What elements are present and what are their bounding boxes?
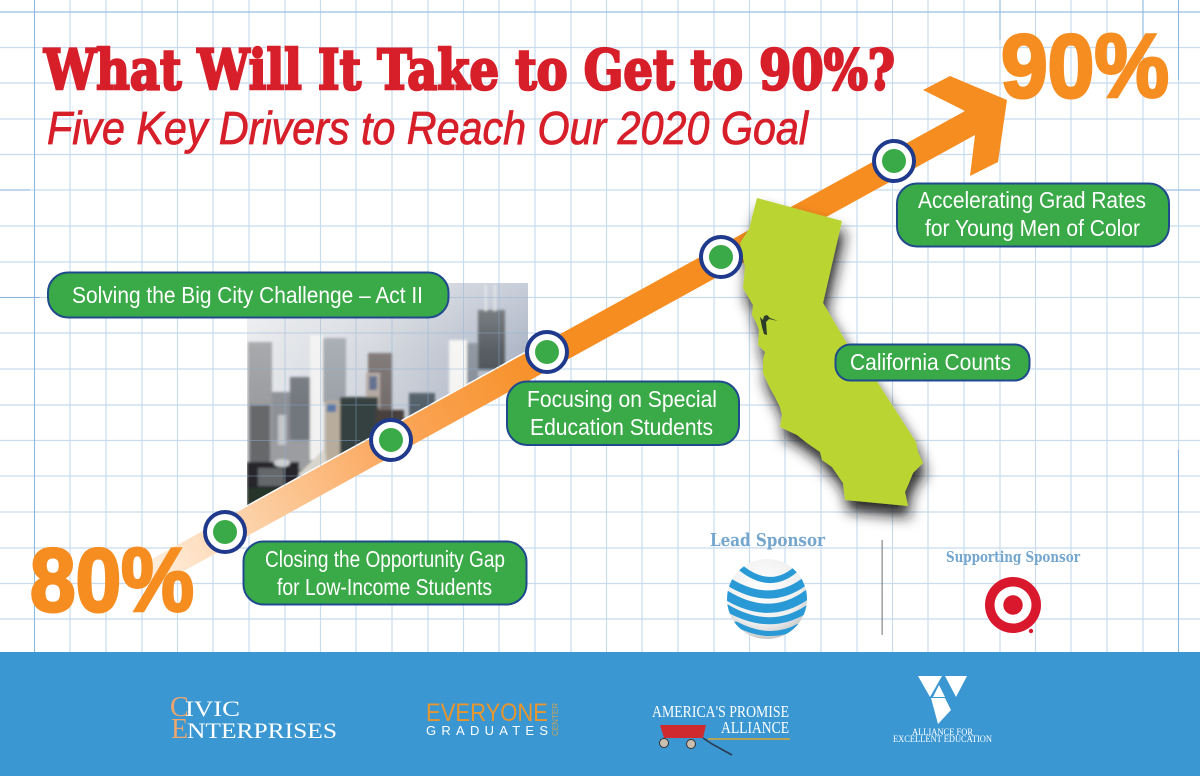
logo: Alliance for Excellent Education [893, 676, 992, 744]
logo: America's Promise Alliance [652, 702, 790, 755]
callout: Solving the Big City Challenge [48, 272, 448, 318]
marker 3 [527, 332, 567, 372]
logo: Alliance for Excellent Education: ALLIANCE FOR [912, 727, 973, 737]
callout: Solving the Big City Challenge: Solving the Big City Challenge – Act II [72, 282, 423, 308]
callout: Accelerating Grad Rates [897, 184, 1169, 246]
logo: Civic Enterprises: C [170, 692, 189, 723]
footer band [0, 652, 1200, 776]
logo: AT&T globe [726, 559, 808, 639]
logo: Target [985, 577, 1041, 633]
logo: America's Promise Alliance: AMERICA'S PROMISE [652, 702, 789, 721]
label: Supporting Sponsor: Supporting Sponsor [946, 548, 1081, 566]
callout: Focusing on Special Education Students: Education Students [530, 414, 713, 440]
callout: California Counts: California Counts [850, 349, 1011, 375]
callout: Accelerating Grad Rates: Accelerating Grad Rates [918, 187, 1146, 213]
callout: Focusing on Special Education Students: Focusing on Special [527, 386, 717, 412]
map: California [740, 198, 923, 506]
callout: Closing the Opportunity Gap: for Low-Income Students [277, 574, 492, 600]
logo: Civic Enterprises: NTERPRISES [187, 718, 337, 743]
callout: Closing the Opportunity Gap: Closing the Opportunity Gap [265, 546, 505, 572]
logo: Everyone Graduates Center: CENTER [551, 703, 560, 736]
marker 5 [874, 141, 914, 181]
callout: California Counts [836, 344, 1030, 380]
photo: city skyline [247, 283, 528, 510]
arrow: 80% to 90% [141, 76, 1007, 588]
logo: Everyone Graduates Center: GRADUATES [426, 723, 548, 738]
big number: 80%: 80% [30, 531, 194, 631]
logo: America's Promise Alliance: ALLIANCE [721, 718, 789, 737]
marker 2 [371, 420, 411, 460]
marker 1 [205, 512, 245, 552]
label: Lead Sponsor: Lead Sponsor [710, 530, 825, 551]
callout: Focusing on Special Education Students [507, 382, 739, 445]
callout: Accelerating Grad Rates: for Young Men of Color [925, 215, 1140, 241]
logo: Alliance for Excellent Education: EXCELLENT EDUCATION [893, 734, 992, 744]
logo: Civic Enterprises [170, 692, 337, 745]
logo: Everyone Graduates Center: EVERYONE [426, 699, 548, 727]
title: What Will It Take to Get to 90%? [43, 37, 895, 102]
logo: Civic Enterprises: IVIC [185, 696, 240, 721]
divider [882, 540, 883, 635]
marker 4 [701, 237, 741, 277]
big number: 90%: 90% [1001, 17, 1169, 117]
subtitle: Five Key Drivers to Reach Our 2020 Goal [47, 102, 810, 154]
logo: Civic Enterprises: E [171, 714, 188, 745]
callout: Closing the Opportunity Gap [244, 542, 526, 604]
